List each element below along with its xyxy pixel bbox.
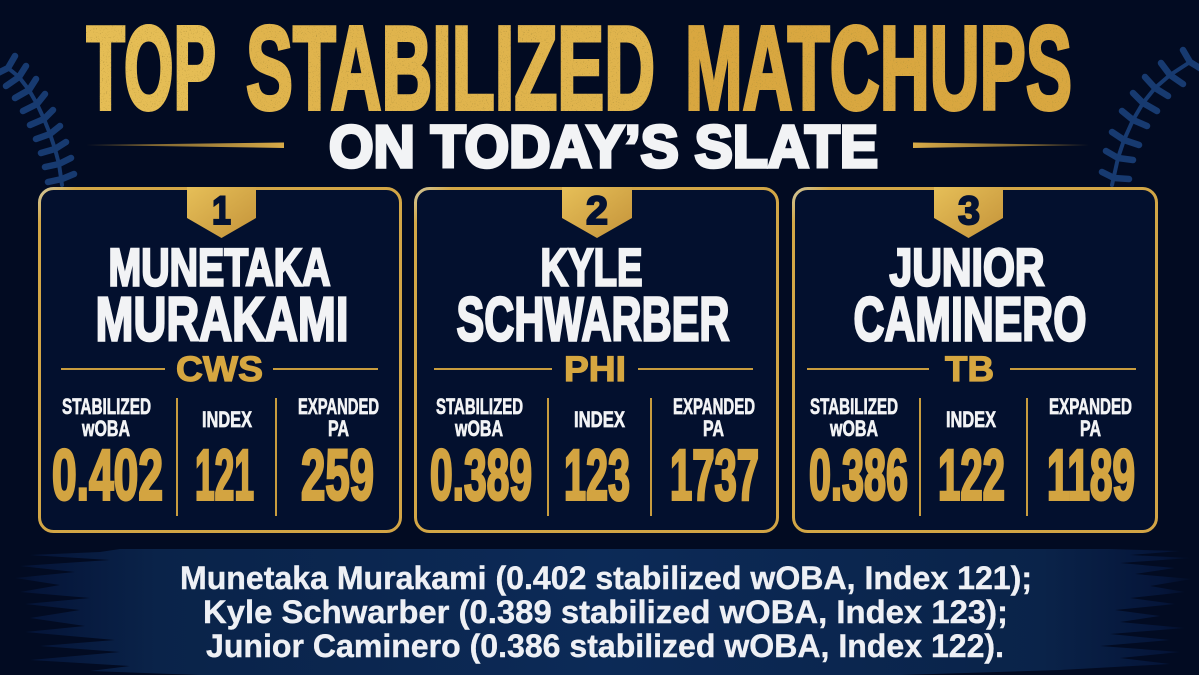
stat: expanded PA: PA — [703, 416, 724, 441]
stat: index — [938, 407, 1005, 516]
panel: card 1 — [40, 187, 400, 532]
badge: rank 1: 1 — [212, 189, 231, 233]
stat: expanded PA: 1737 — [670, 436, 759, 516]
player name: CAMINERO — [854, 286, 1086, 354]
player name: KYLE — [540, 238, 642, 298]
badge: rank 2: 2 — [586, 189, 608, 233]
summary text: Munetaka Murakami (0.402 stabilized wOBA, Index 121); — [180, 560, 1032, 596]
stat: index: INDEX — [574, 407, 625, 432]
player name: JUNIOR — [890, 238, 1044, 298]
team row: TB — [945, 350, 994, 389]
badge: rank 2 — [562, 187, 632, 238]
badge: rank 1 — [187, 187, 256, 238]
stat: stabilized wOBA — [52, 394, 163, 516]
player name: SCHWARBER — [456, 286, 730, 354]
stat: stabilized wOBA: 0.402 — [52, 436, 163, 516]
stat: stabilized wOBA: STABILIZED — [62, 394, 151, 419]
stat: expanded PA: EXPANDED — [298, 394, 379, 419]
stat: index: 123 — [564, 436, 630, 516]
stat: stabilized wOBA: STABILIZED — [810, 394, 898, 419]
stat: stabilized wOBA — [430, 394, 532, 516]
summary text: Kyle Schwarber (0.389 stabilized wOBA, Index 123); — [203, 594, 1008, 630]
icon: right baseball seam — [1102, 50, 1199, 185]
stat: expanded PA: PA — [328, 416, 349, 441]
stat: stabilized wOBA: 0.386 — [809, 436, 908, 516]
stat: expanded PA: PA — [1080, 416, 1101, 441]
left gold rule — [86, 142, 284, 148]
panel: card 1: 121 — [195, 436, 254, 516]
stat: stabilized wOBA: wOBA — [454, 416, 503, 441]
summary band — [15, 549, 1192, 675]
stat: expanded PA: 259 — [301, 436, 374, 516]
team row: CWS — [176, 350, 263, 389]
stat: stabilized wOBA: 0.389 — [430, 436, 532, 516]
stat: stabilized wOBA — [809, 394, 908, 516]
stat: index — [195, 407, 254, 516]
stat: index — [564, 407, 630, 516]
title: TOP — [86, 2, 216, 135]
stat: index: INDEX — [202, 407, 252, 432]
player name — [456, 238, 730, 354]
panel: card 3 — [794, 187, 1156, 532]
player name: MUNETAKA — [108, 238, 330, 298]
stat: expanded PA: 1189 — [1047, 436, 1135, 516]
panel: card 2 — [416, 187, 778, 532]
stat: expanded PA — [298, 394, 379, 516]
team row: PHI — [564, 350, 626, 389]
badge: rank 3 — [934, 187, 1003, 238]
stat: expanded PA — [670, 394, 759, 516]
title: STABILIZED — [246, 2, 655, 135]
player name — [96, 238, 348, 354]
summary text: Junior Caminero (0.386 stabilized wOBA, Index 122). — [206, 628, 1004, 664]
right gold rule — [913, 142, 1089, 148]
icon: left baseball seam — [0, 56, 74, 185]
player name: MURAKAMI — [96, 286, 348, 354]
player name — [854, 238, 1086, 354]
stat: expanded PA: EXPANDED — [1049, 394, 1132, 419]
stat: index: 122 — [938, 436, 1005, 516]
stat: stabilized wOBA: wOBA — [829, 416, 878, 441]
summary text — [180, 560, 1032, 664]
stat: stabilized wOBA: wOBA — [81, 416, 130, 441]
stat: expanded PA: EXPANDED — [673, 394, 755, 419]
stat: expanded PA — [1047, 394, 1135, 516]
badge: rank 3: 3 — [958, 189, 980, 233]
stat: stabilized wOBA: STABILIZED — [436, 394, 523, 419]
subtitle: ON TODAY’S SLATE — [329, 114, 878, 180]
stat: index: INDEX — [946, 407, 996, 432]
